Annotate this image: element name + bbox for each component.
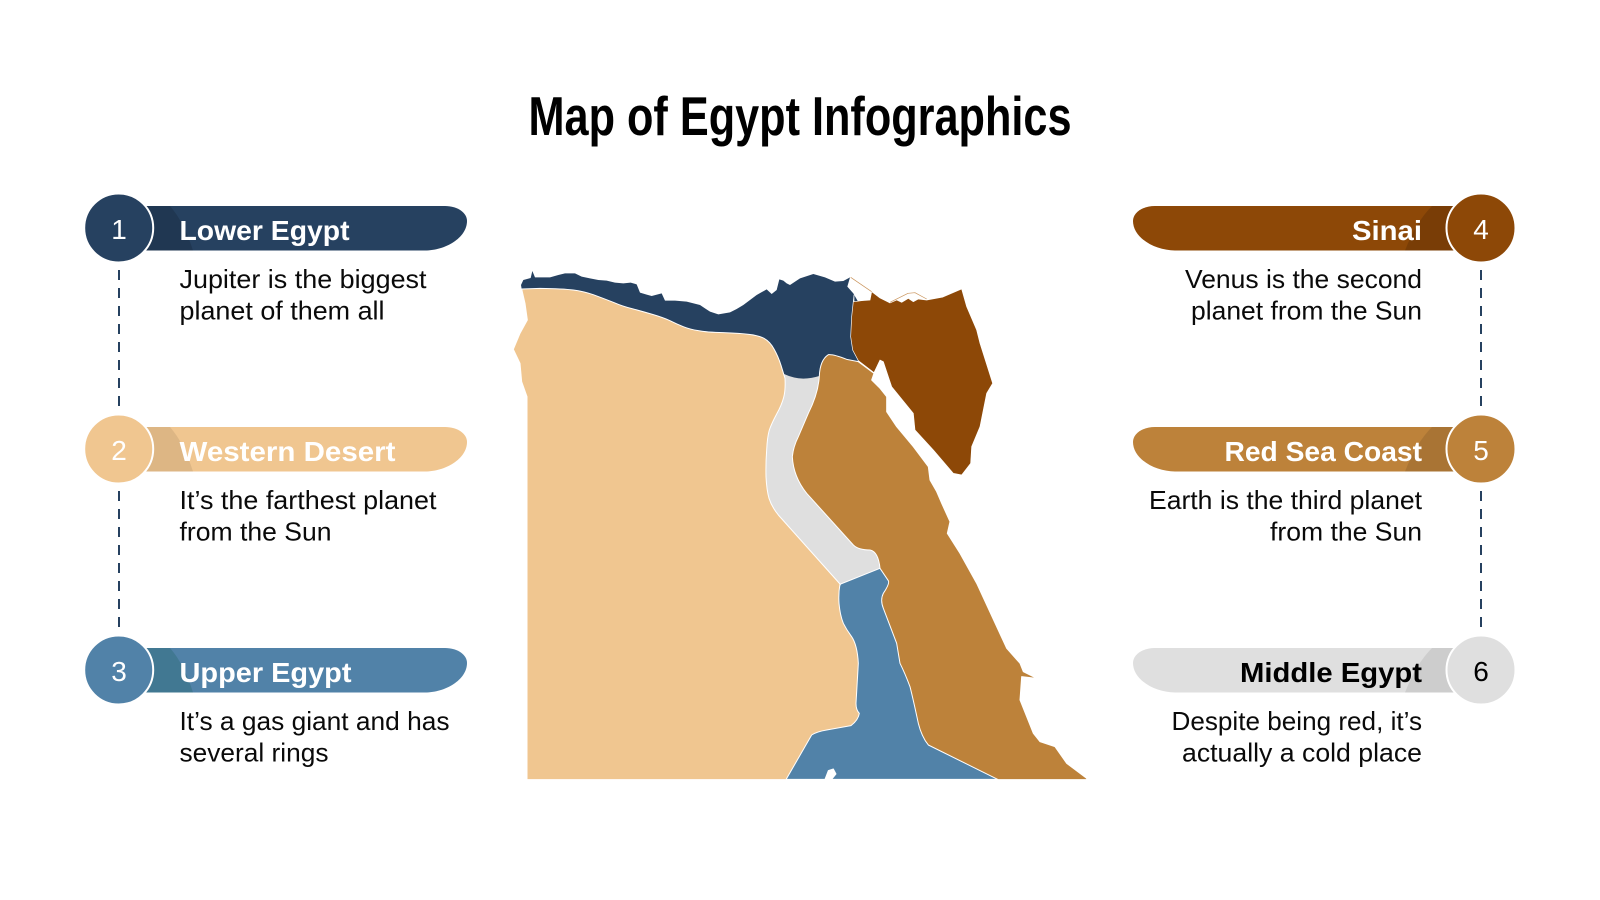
- region: Western Desert: [513, 288, 859, 780]
- heading: Middle Egypt: [1240, 657, 1422, 688]
- number badge: [1446, 194, 1516, 262]
- number: 6: [1473, 656, 1489, 687]
- number badge: [1446, 414, 1516, 484]
- description: planet from the Sun: [1191, 296, 1422, 326]
- description: Despite being red, it’s: [1172, 706, 1422, 736]
- description: It’s the farthest planet: [180, 485, 437, 515]
- number badge: [84, 636, 153, 704]
- heading: Sinai: [1352, 215, 1422, 246]
- banner: [1133, 427, 1481, 472]
- description: planet of them all: [180, 296, 384, 326]
- panel: item 1 Lower Egypt: [84, 194, 467, 407]
- connector line 2 to 3: [118, 491, 120, 628]
- banner shadow: [119, 648, 193, 692]
- panel: item 4 Sinai: [1133, 194, 1516, 407]
- banner: [1133, 206, 1481, 250]
- banner shadow: [1405, 206, 1481, 250]
- number: 1: [111, 214, 127, 245]
- banner: [119, 206, 467, 250]
- description: Jupiter is the biggest: [180, 264, 427, 294]
- banner: [119, 648, 467, 692]
- banner shadow: [119, 427, 193, 472]
- connector line 1 to 2: [118, 270, 120, 407]
- heading: Upper Egypt: [180, 657, 352, 688]
- banner: [119, 427, 467, 472]
- panel: item 6 Middle Egypt: [1133, 636, 1516, 768]
- description: actually a cold place: [1182, 738, 1422, 768]
- title: Map of Egypt Infographics: [528, 85, 1072, 147]
- connector line 4 to 5: [1480, 270, 1482, 407]
- region: Lower Egypt: [521, 271, 867, 379]
- panel: item 5 Red Sea Coast: [1133, 414, 1516, 628]
- number badge: [84, 194, 153, 262]
- number badge: [1446, 636, 1516, 704]
- number: 2: [111, 435, 127, 466]
- description: from the Sun: [180, 516, 332, 546]
- number: 3: [111, 656, 127, 687]
- description: Venus is the second: [1185, 264, 1422, 294]
- lagoon line: north Sinai coast: [851, 277, 927, 302]
- heading: Western Desert: [180, 436, 396, 467]
- banner shadow: [1405, 648, 1481, 692]
- description: from the Sun: [1270, 516, 1422, 546]
- panel: item 3 Upper Egypt: [84, 636, 467, 768]
- panel: item 2 Western Desert: [84, 414, 467, 628]
- heading: Red Sea Coast: [1224, 436, 1422, 467]
- region: Middle Egypt: [750, 367, 883, 587]
- banner: [1133, 648, 1481, 692]
- number badge: [84, 414, 153, 484]
- region: Sinai: [851, 289, 993, 475]
- number: 4: [1473, 214, 1489, 245]
- heading: Lower Egypt: [180, 215, 350, 246]
- banner shadow: [1405, 427, 1481, 472]
- map of Egypt: [513, 271, 1087, 780]
- connector line 5 to 6: [1480, 491, 1482, 628]
- number: 5: [1473, 435, 1489, 466]
- description: Earth is the third planet: [1149, 485, 1423, 515]
- banner shadow: [119, 206, 193, 250]
- region: Red Sea Coast: [792, 355, 1087, 780]
- description: It’s a gas giant and has: [180, 706, 450, 736]
- region: Upper Egypt: [786, 568, 998, 779]
- description: several rings: [180, 738, 328, 768]
